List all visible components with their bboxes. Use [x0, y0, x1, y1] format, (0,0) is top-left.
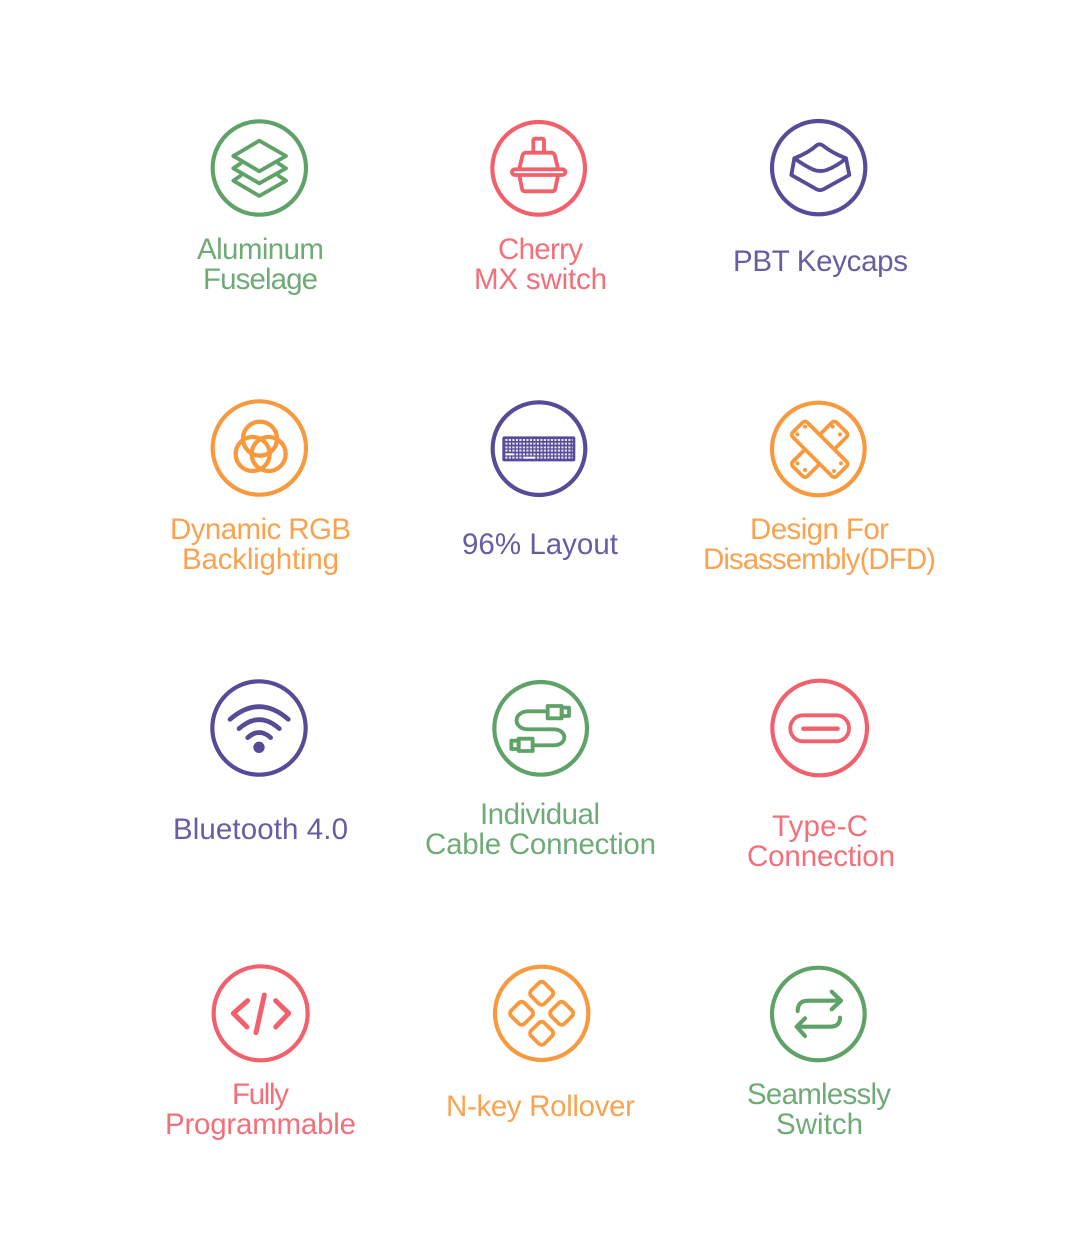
- label: Cherry MX switch: MX switch: [474, 263, 607, 296]
- icon: stacked layers: [213, 121, 306, 215]
- feature: Aluminum Fuselage: [197, 121, 324, 296]
- label: Dynamic RGB Backlighting: [170, 513, 351, 576]
- feature: 96% Layout: [462, 402, 618, 561]
- label: Dynamic RGB Backlighting: Dynamic RGB: [170, 513, 351, 546]
- label: Type-C Connection: [747, 810, 895, 873]
- icon: cable with plugs: [494, 682, 587, 775]
- feature: Bluetooth 4.0: [173, 681, 348, 846]
- feature: Type-C Connection: [747, 681, 895, 873]
- label: Seamlessly Switch: Seamlessly: [747, 1078, 891, 1111]
- icon: USB-C port: [772, 681, 867, 775]
- label: Aluminum Fuselage: Fuselage: [203, 263, 318, 296]
- label: Type-C Connection: Type-C: [772, 810, 868, 843]
- icon: mechanical switch: [492, 122, 585, 215]
- label: Cherry MX switch: [474, 233, 607, 296]
- label: Design For Disassembly(DFD): Disassembly(DFD): [703, 543, 936, 576]
- label: Fully Programmable: Programmable: [165, 1108, 356, 1141]
- icon: switch arrows: [772, 968, 865, 1060]
- label: Fully Programmable: [165, 1078, 356, 1141]
- label: Cherry MX switch: Cherry: [498, 233, 583, 266]
- label: Aluminum Fuselage: [197, 233, 324, 296]
- icon: four diamond keys: [495, 967, 588, 1060]
- feature: PBT Keycaps: [733, 121, 908, 278]
- feature: Individual Cable Connection: [425, 682, 656, 861]
- label: N-key Rollover: N-key Rollover: [446, 1090, 635, 1123]
- feature: Seamlessly Switch: [747, 968, 891, 1141]
- feature: N-key Rollover: [446, 967, 635, 1123]
- icon: keycap: [772, 121, 865, 214]
- icon: keyboard: [493, 402, 585, 495]
- label: 96% Layout: 96% Layout: [462, 528, 618, 561]
- feature: Cherry MX switch: [474, 122, 607, 296]
- label: Design For Disassembly(DFD): Design For: [750, 513, 889, 546]
- label: Individual Cable Connection: Individual: [480, 798, 600, 831]
- label: Seamlessly Switch: [747, 1078, 891, 1141]
- label: Individual Cable Connection: Cable Connection: [425, 828, 656, 861]
- feature: Design For Disassembly (DFD): [703, 403, 936, 576]
- icon: code brackets: [214, 966, 308, 1060]
- label: Seamlessly Switch: Switch: [776, 1108, 863, 1141]
- label: Design For Disassembly(DFD): [703, 513, 936, 576]
- label: Type-C Connection: Connection: [747, 840, 895, 873]
- icon: overlapping RGB circles: [213, 401, 306, 495]
- label: PBT Keycaps: PBT Keycaps: [733, 245, 908, 278]
- label: Bluetooth 4.0: Bluetooth 4.0: [173, 813, 348, 846]
- label: Individual Cable Connection: [425, 798, 656, 861]
- icon: wireless signal: [212, 681, 306, 775]
- label: Fully Programmable: Fully: [232, 1078, 289, 1111]
- feature: Fully Programmable: [165, 966, 356, 1141]
- feature: Dynamic RGB Backlighting: [170, 401, 351, 576]
- label: Dynamic RGB Backlighting: Backlighting: [182, 543, 339, 576]
- label: Aluminum Fuselage: Aluminum: [197, 233, 324, 266]
- icon: crossed plates: [772, 403, 865, 495]
